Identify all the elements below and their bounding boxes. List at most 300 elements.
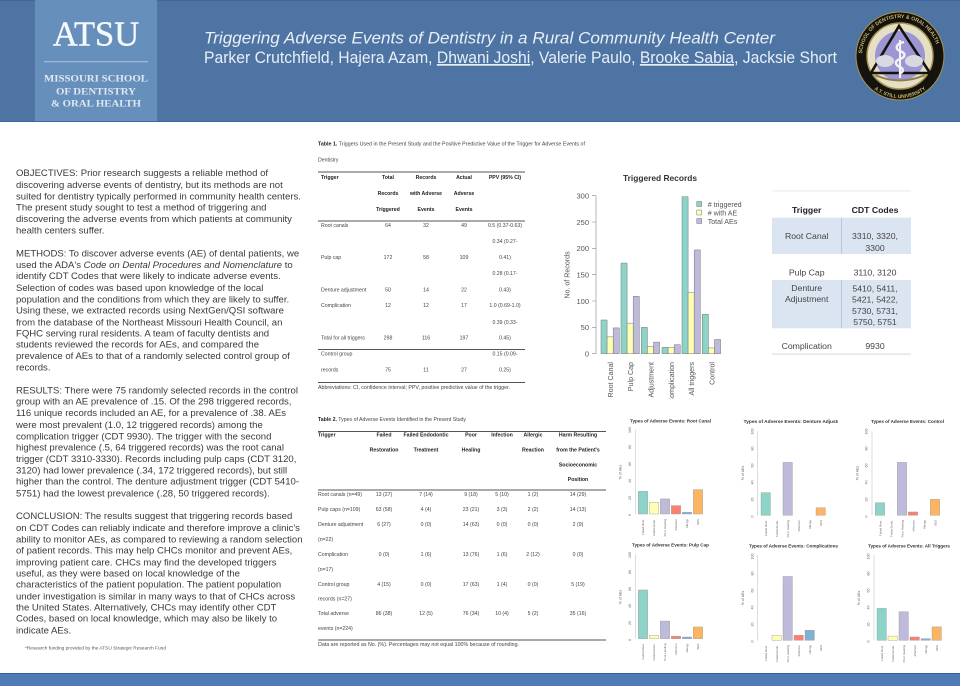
table 2 rows: 86 (38): [376, 611, 392, 617]
table 1 rows: 64: [385, 223, 391, 229]
logo panel: ATSU: & ORAL HEALTH: [51, 98, 142, 110]
conclusion: on CDT Codes can reliably indicate and therefore improve a clinic's: [16, 523, 300, 534]
logo panel: ATSU: [35, 0, 157, 121]
conclusion: ability to monitor AEs, as compared to reviewing a random selection: [16, 534, 303, 546]
small chart: complications: 0: [750, 640, 754, 642]
table: CDT codes by trigger: [772, 190, 911, 354]
small chart: control: Allergy: [922, 520, 926, 529]
table 1 rows: 32: [423, 223, 429, 229]
small chart: denture adjustment: % of AEs: [741, 466, 745, 480]
objectives: health centers suffer.: [16, 226, 104, 236]
table 1 header: Events: [455, 207, 473, 213]
table 1 rows: [321, 223, 522, 374]
logo panel: ATSU: MISSOURI SCHOOL: [44, 74, 148, 84]
table 2 rows: (n=17): [318, 567, 333, 573]
bars: [601, 197, 721, 354]
table 2 rows: 76 (34): [463, 611, 479, 617]
small chart: denture adjustment: 100: [750, 428, 754, 434]
small chart: complications: Failed Rest.: [764, 645, 768, 661]
table 1 rows: Total for all triggers: [321, 336, 365, 342]
small chart: root canal: Types of Adverse Events: Root Canal: [630, 418, 711, 424]
table 1 rows: 14: [423, 288, 429, 294]
y axis: 250: [576, 218, 589, 227]
table 2 rows: Total adverse: [318, 611, 349, 617]
table 1 rows: 22: [461, 288, 467, 294]
table 2 header: Healing: [462, 448, 480, 454]
table 2 rows: 6 (27): [377, 522, 391, 528]
table 1 header: Trigger: [321, 175, 339, 181]
table 2 rows: Root canals (n=49): [318, 492, 362, 498]
table 2 rows: [318, 492, 586, 632]
small chart: all triggers: 20: [866, 622, 870, 626]
table 2 rows: 0 (0): [497, 522, 508, 528]
small chart: root canal: [618, 418, 711, 536]
y axis: 0: [585, 350, 589, 358]
methods: METHODS: To discover adverse events (AE) of dental patients, we: [16, 248, 299, 260]
y axis: No. of Records: [564, 251, 572, 299]
results: trigger (CDT 3310-3330). Records including pulp caps (CDT 3120,: [16, 454, 296, 465]
table 1 rows: 0.5 (0.37-0.63): [488, 223, 522, 229]
small chart: all triggers: 60: [866, 588, 870, 592]
small chart: pulp cap: Failed Rest.: [641, 643, 645, 660]
objectives: suited for dentistry typically performed in community health centers.: [16, 192, 301, 202]
table 1 rows: Complication: [321, 303, 351, 309]
table 1 rows: 0.41): [499, 255, 511, 261]
small chart: pulp cap: Allergy: [685, 643, 689, 653]
conclusion: [16, 511, 303, 636]
small chart: complications: 100: [750, 554, 754, 560]
small chart: pulp cap: [618, 542, 709, 661]
table 1 rows: 0.43): [499, 288, 511, 294]
y axis: 100: [576, 297, 589, 306]
table 1 rows: 75: [385, 368, 391, 374]
small chart: complications: % of AEs: [741, 591, 745, 605]
results: higher than the control. The denture adjustment trigger (CDT 5410-: [16, 476, 299, 488]
small chart: complications: 20: [750, 622, 754, 626]
results: [15, 386, 299, 500]
small chart: denture adjustment: SES: [819, 520, 823, 526]
table rows: 9930: [865, 341, 885, 351]
table 2 rows: 0 (0): [421, 582, 432, 588]
objectives: OBJECTIVES: Prior research suggests a reliable method of: [16, 168, 268, 179]
small chart: pulp cap: Poor Healing: [663, 643, 667, 661]
y axis: 150: [576, 270, 589, 280]
table 1 caption: Dentistry: [318, 158, 339, 164]
table 2 rows: 23 (21): [463, 507, 479, 513]
table 2 header: Socioeconomic: [559, 462, 597, 468]
table 1 rows: 0.34 (0.27-: [492, 239, 518, 245]
results: group with an AE prevalence of .15. Of the 298 triggered records,: [16, 396, 291, 408]
conclusion: CONCLUSION: The results suggest that triggering records based: [16, 511, 292, 522]
objectives: discovering the adverse events from which patients at community: [16, 214, 292, 225]
small chart: complications: SES: [819, 645, 823, 651]
small chart: complications: [741, 544, 838, 662]
table header: Trigger: [792, 205, 822, 215]
small chart: complications: 40: [750, 606, 754, 610]
small chart: pulp cap: Infection: [674, 643, 678, 655]
table 1 abbreviations: Abbreviations: CI, confidence interval; PPV, positive predictive value of the trigger.: [318, 385, 510, 391]
table 2 rows: 2 (2): [528, 507, 539, 513]
small chart: all triggers: Types of Adverse Events: All Triggers: [868, 544, 950, 548]
small chart: complications: Infection: [797, 645, 801, 656]
table rows: Root Canal: [785, 231, 828, 241]
y axis: 300: [576, 192, 589, 200]
table rows: Pulp Cap: [789, 268, 825, 278]
table 2 caption: Table 2. Types of Adverse Events Identified in the Present Study: [318, 417, 466, 423]
small chart: denture adjustment: Failed Rest.: [764, 520, 768, 536]
table 2 rows: 0 (0): [573, 552, 584, 558]
table 1 header: Adverse: [454, 191, 474, 197]
table 1 rows: 0.28 (0.17-: [492, 271, 518, 277]
table 1 rows: 50: [385, 288, 391, 294]
table rows: 5730, 5731,: [852, 306, 898, 316]
small chart: all triggers: Infection: [913, 645, 917, 656]
small chart: complications: 60: [750, 588, 754, 592]
abstract text column: [15, 168, 303, 650]
methods: records.: [16, 362, 50, 374]
small chart: all triggers: 0: [866, 640, 870, 642]
small chart: root canal: 80: [628, 445, 632, 449]
x labels: Pulp Cap: [627, 362, 635, 391]
icon: school seal: [856, 12, 944, 100]
table 1 header: [321, 175, 521, 213]
small chart: all triggers: 80: [866, 572, 870, 576]
small chart: control: Types of Adverse Events: Control: [871, 419, 944, 424]
logo panel: ATSU: ATSU: [53, 16, 139, 54]
legend: Total AEs: [708, 218, 738, 226]
table rows: Complication: [782, 341, 832, 351]
conclusion: indicate AEs.: [16, 626, 71, 636]
table 2 rows: 12 (5): [419, 611, 433, 617]
results: 116 unique records included an AE, for a prevalence of .38. AEs: [16, 408, 286, 419]
objectives: [16, 168, 301, 236]
table 2 header: from the Patient's: [556, 448, 600, 454]
table 2 rows: 1 (4): [497, 582, 508, 588]
small chart: denture adjustment: 20: [750, 498, 754, 502]
table 2 header: Failed Endodontic: [404, 432, 449, 438]
methods: FQHC serving rural residents. A team of faculty dentists and: [16, 328, 269, 340]
x labels: Control: [708, 362, 716, 385]
small chart: complications: Allergy: [808, 645, 812, 654]
table 2 header: Trigger: [318, 432, 336, 438]
small chart: root canal: % of AEs: [618, 465, 622, 479]
table rows: Adjustment: [785, 294, 829, 304]
table 2 rows: 1 (6): [421, 552, 432, 558]
methods: used the ADA's Code on Dental Procedures and Nomenclature to: [16, 260, 293, 271]
small chart: control: 60: [864, 464, 868, 468]
table 1 rows: 0.25): [499, 368, 511, 374]
table 1 header: with Adverse: [409, 191, 442, 197]
logo panel: ATSU: OF DENTISTRY: [56, 86, 136, 98]
small chart: control: 0: [864, 516, 868, 518]
table 2 rows: (n=22): [318, 537, 333, 543]
small chart: all triggers: Failed Endo.: [891, 645, 895, 662]
methods: Using these, we extracted records using NextGen/QSI software: [16, 306, 284, 316]
small chart: pulp cap: 20: [628, 621, 632, 625]
x labels: Complication: [668, 362, 676, 403]
small chart: complications: Types of Adverse Events: Complications: [749, 544, 838, 548]
table 2 rows: 5 (2): [528, 611, 539, 617]
funding footnote: *Research funding provided by the ATSU Strategic Research Fund: [25, 646, 166, 650]
results: were most prevalent (1.0, 12 triggered records) among the: [15, 420, 263, 431]
small chart: denture adjustment: 80: [750, 446, 754, 450]
table 2 header: Infection: [491, 432, 513, 438]
table 2 rows: 17 (63): [463, 582, 479, 588]
table 2 rows: 0 (0): [379, 552, 390, 558]
legend: [697, 201, 742, 226]
small chart: all triggers: Poor Healing: [902, 645, 906, 662]
x labels: Adjustment: [648, 362, 656, 398]
table 1 rows: Control group: [321, 352, 353, 358]
table rows: 3310, 3320,: [852, 231, 898, 241]
small chart: control: Failed Endo.: [890, 520, 894, 537]
conclusion: useful, as they were based on local knowledge of the: [16, 568, 240, 580]
small chart: pulp cap: 60: [628, 587, 632, 591]
conclusion: of patient records. This may help CHCs monitor and prevent AEs,: [16, 546, 292, 556]
small chart: root canal: Failed Rest.: [641, 519, 645, 535]
table 2 rows: Pulp caps (n=109): [318, 507, 361, 513]
table 1 rows: 12: [385, 303, 391, 309]
small chart: denture adjustment: Types of Adverse Events: Denture Adjustment: [744, 419, 849, 424]
objectives: discovering adverse events of dentistry, but its methods are not: [16, 180, 283, 191]
conclusion: characteristics of the patient population. The patient population: [16, 580, 281, 590]
bottom bar: [0, 673, 960, 686]
small chart: control: 100: [864, 428, 868, 434]
table 1 rows: Pulp cap: [321, 255, 341, 261]
table 2 rows: 2 (9): [573, 522, 584, 528]
small chart: root canal: Infection: [674, 519, 678, 530]
small chart: root canal: 60: [628, 462, 632, 466]
table rows: [782, 231, 898, 351]
methods: Selection of codes was based upon knowledge of the local: [16, 283, 263, 294]
small chart: pulp cap: Types of Adverse Events: Pulp Cap: [632, 542, 709, 548]
small chart: pulp cap: 80: [628, 570, 632, 574]
x labels: All triggers: [688, 362, 696, 396]
small chart: all triggers: SES: [935, 645, 939, 651]
small chart: pulp cap: Failed Endo.: [652, 643, 656, 660]
table 2 header: Position: [568, 477, 588, 483]
small chart: denture adjustment: Poor Healing: [786, 520, 790, 537]
small chart: control: Infection: [912, 520, 916, 531]
table 2 rows: 63 (58): [376, 507, 392, 513]
small chart: pulp cap: 0: [628, 639, 632, 641]
table 2 rows: 14 (29): [570, 492, 586, 498]
table 1 rows: 58: [423, 255, 429, 261]
small chart: control: 80: [864, 446, 868, 450]
small chart: all triggers: Allergy: [924, 645, 928, 654]
table 2 rows: 13 (76): [463, 552, 479, 558]
table 1 rows: 172: [384, 255, 392, 261]
table 1 rows: 0.45): [499, 336, 511, 342]
small chart: root canal: 100: [628, 427, 632, 433]
small chart: root canal: 20: [628, 496, 632, 500]
small chart: root canal: Poor Healing: [663, 519, 667, 536]
table 2 rows: 0 (0): [421, 522, 432, 528]
table 2 header: Reaction: [522, 448, 544, 454]
y axis: 50: [581, 323, 589, 332]
table 1 rows: Root canals: [321, 223, 349, 229]
table 2 rows: 7 (14): [419, 492, 433, 498]
small chart: all triggers: [857, 544, 950, 662]
table 2 rows: 4 (4): [421, 507, 432, 513]
table 1 header: Records: [416, 175, 436, 181]
small chart: denture adjustment: Allergy: [808, 520, 812, 529]
small chart: denture adjustment: Infection: [797, 520, 801, 531]
table 1: triggers and PPV: [318, 142, 586, 391]
table 1 rows: 1.0 (0.69-1.0): [489, 303, 521, 309]
small chart: root canal: 40: [628, 479, 632, 483]
small chart: all triggers: Failed Rest.: [880, 645, 884, 661]
table 1 rows: 12: [423, 303, 429, 309]
table 2 rows: 0 (0): [528, 522, 539, 528]
methods: [16, 248, 299, 374]
table header: [792, 205, 899, 215]
table 2 rows: events (n=224): [318, 626, 353, 632]
conclusion: the United States. Alternatively, CHCs may identify other CDT: [16, 602, 277, 614]
methods: students reviewed the records for AEs, and compared the: [16, 340, 259, 350]
table 1 rows: 17: [461, 303, 467, 309]
table 2 rows: 35 (16): [570, 611, 586, 617]
small chart: denture adjustment: [742, 420, 838, 538]
table 2 rows: 10 (4): [495, 611, 509, 617]
methods: from the database of the Northeast Missouri Health Council, an: [16, 318, 282, 328]
table rows: 3110, 3120: [854, 268, 897, 278]
small chart: pulp cap: 40: [628, 604, 632, 608]
small chart: pulp cap: % of AEs: [618, 590, 622, 604]
table 2 rows: 13 (27): [376, 492, 392, 498]
table 2 rows: 0 (0): [528, 582, 539, 588]
small chart: pulp cap: SES: [696, 644, 700, 650]
conclusion: under investigation is similar in many ways to that of CHCs across: [16, 592, 295, 602]
table 1 caption: [318, 142, 586, 164]
table 2 rows: 14 (13): [570, 507, 586, 513]
small chart: complications: Failed Endo.: [775, 645, 779, 662]
table 1 rows: 0.15 (0.09-: [492, 352, 518, 358]
table 2 header: Harm Resulting: [559, 432, 597, 438]
table 1 rows: 0.39 (0.33-: [492, 320, 518, 326]
header band: [0, 0, 960, 122]
y axis: [564, 192, 596, 358]
icon: school seal: SCHOOL OF DENTISTRY & ORAL HEALTH: [858, 14, 940, 54]
table 2 rows: 5 (10): [495, 492, 509, 498]
table 2 header: Poor: [465, 432, 477, 438]
table 2: types of adverse events: [318, 417, 606, 648]
small chart: control: Poor Healing: [900, 520, 904, 537]
small chart: all triggers: % of AEs: [857, 591, 861, 605]
table 2 rows: Denture adjustment: [318, 522, 364, 528]
table 2 rows: 5 (19): [571, 582, 585, 588]
table 2 header: Restoration: [370, 448, 398, 454]
table 1 header: Records: [378, 191, 398, 197]
table 2 rows: 14 (63): [463, 522, 479, 528]
results: 5751) had the lowest prevalence (.28, 50 triggered records).: [16, 488, 270, 500]
table 1 rows: 109: [460, 255, 468, 261]
results: 3120) had lower prevalence (.34, 172 triggered records), but still: [16, 466, 287, 476]
table 2 rows: 1 (6): [497, 552, 508, 558]
small chart: control: 40: [864, 480, 868, 484]
table 2 rows: Complication: [318, 552, 348, 558]
table 1 rows: records: [321, 368, 339, 374]
x labels: [608, 362, 714, 399]
small chart: root canal: 0: [628, 514, 632, 516]
table 1 rows: 197: [460, 336, 468, 342]
small chart: control: [856, 419, 944, 537]
small chart: pulp cap: 100: [628, 552, 632, 558]
methods: population and the conditions from which they are likely to suffer.: [16, 294, 289, 306]
table rows: 3300: [865, 243, 885, 253]
table 2 header: Allergic: [523, 432, 543, 438]
small chart: complications: Poor Healing: [786, 645, 790, 662]
methods: prevalence of AEs to that of a randomly selected control group of: [16, 351, 290, 362]
table 1 header: Actual: [456, 175, 472, 181]
table 2 rows: Control group: [318, 582, 350, 588]
authors: Parker Crutchfield, Hajera Azam, Dhwani Joshi, Valerie Paulo, Brooke Sabia, Jacksie Short: [204, 48, 837, 67]
table rows: 5750, 5751: [853, 317, 897, 327]
table 1 caption: Table 1. Triggers Used in the Present Study and the Positive Predictive Value of the Trigger for Adverse Events of: [318, 142, 586, 148]
small chart: control: 20: [864, 498, 868, 502]
table 2 rows: 2 (12): [526, 552, 540, 558]
table rows: Denture: [791, 283, 822, 293]
table 2 header: Failed: [376, 432, 392, 438]
small chart: root canal: Allergy: [685, 519, 689, 528]
table 1 header: Total: [382, 175, 395, 181]
table 1 rows: 11: [423, 368, 429, 374]
small chart: control: SES: [934, 520, 938, 526]
table 2 rows: 9 (18): [464, 492, 478, 498]
small chart: all triggers: 100: [866, 554, 870, 560]
table 1 header: Triggered: [376, 207, 400, 213]
table 1 header: PPV (95% CI): [489, 175, 521, 181]
table 2 rows: records (n=27): [318, 596, 352, 602]
small chart: all triggers: 40: [866, 606, 870, 610]
table 2 note: Data are reported as No. (%). Percentages may not equal 100% because of rounding.: [318, 642, 519, 648]
small chart: root canal: SES: [696, 519, 700, 525]
table 1 rows: Denture adjustment: [321, 288, 367, 294]
legend: # triggered: [708, 201, 742, 209]
small chart: denture adjustment: Failed Endo.: [775, 520, 779, 537]
table 1 rows: 116: [422, 336, 430, 342]
small chart: control: Failed Rest.: [878, 520, 882, 536]
table 2 header: Treatment: [414, 448, 439, 454]
table 1 header: Events: [417, 207, 435, 213]
poster title: Triggering Adverse Events of Dentistry in a Rural Community Health Center: [204, 28, 776, 48]
table 2 header: [318, 432, 600, 483]
results: complication trigger (CDT 9930). The trigger with the second: [16, 432, 271, 442]
conclusion: Codes, based on local knowledge, which may also be likely to: [16, 614, 277, 624]
small chart: denture adjustment: 0: [750, 516, 754, 518]
small chart: denture adjustment: 40: [750, 480, 754, 484]
table 1 rows: 27: [461, 368, 467, 374]
chart title: Triggered Records: [623, 173, 697, 183]
small chart: complications: 80: [750, 572, 754, 576]
table 2 rows: 3 (3): [497, 507, 508, 513]
x labels: Root Canal: [607, 362, 615, 398]
table 1 rows: 49: [461, 223, 467, 229]
table 2 rows: 4 (15): [377, 582, 391, 588]
table header: CDT Codes: [852, 205, 899, 215]
results: highest prevalence (.5, 64 triggered records) was the root canal: [16, 442, 284, 454]
bar chart: triggered records: [564, 173, 742, 403]
table 2 rows: 1 (2): [528, 492, 539, 498]
table rows: 5421, 5422,: [852, 294, 898, 304]
icon: school seal: A.T. STILL UNIVERSITY: [874, 86, 925, 98]
table 1 rows: 298: [384, 336, 392, 342]
results: RESULTS: There were 75 randomly selected records in the control: [16, 386, 298, 396]
legend: # with AE: [708, 209, 738, 217]
small chart: denture adjustment: 60: [750, 464, 754, 468]
conclusion: improving patient care. CHCs may find the developed triggers: [16, 558, 277, 568]
table rows: 5410, 5411,: [852, 284, 898, 294]
